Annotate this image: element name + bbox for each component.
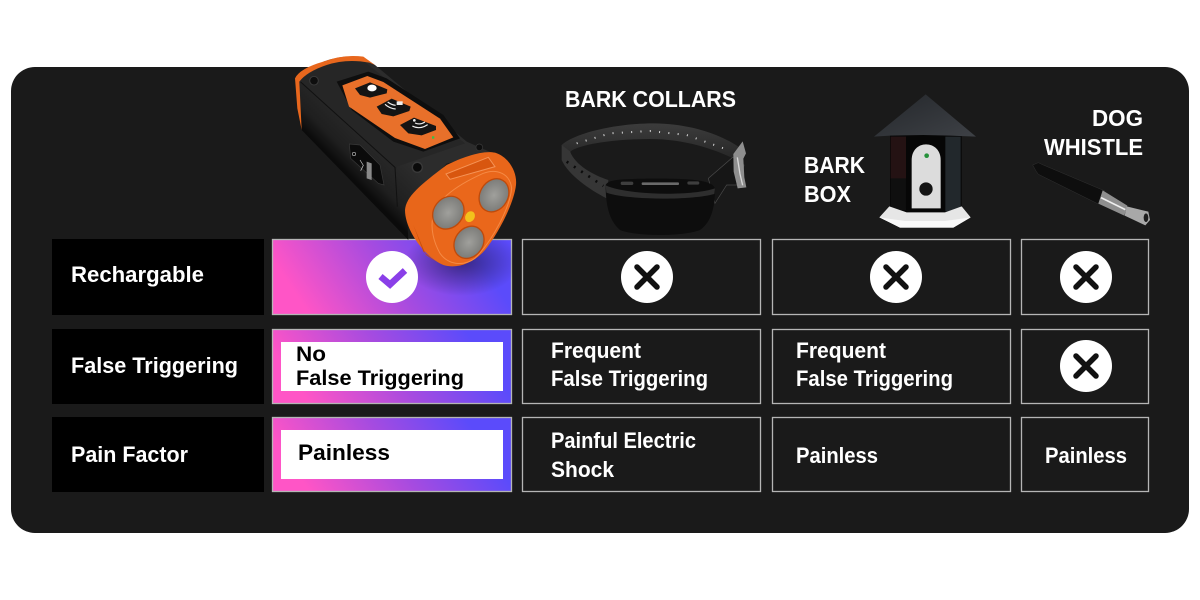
heading: Bark Box: BARK [804, 152, 865, 178]
icon: dog whistle [1033, 163, 1150, 225]
label: Rechargable: Rechargable [71, 262, 204, 287]
bark box white panel [912, 144, 941, 208]
row: False Triggering [52, 329, 1148, 404]
bark collars cell text: Shock [551, 457, 615, 482]
highlighted cell with check icon [272, 228, 520, 314]
bark box cell text: False Triggering [796, 366, 953, 391]
bark box cell text: Frequent [796, 338, 887, 363]
collar strap front [562, 145, 608, 198]
heading: Bark Box [804, 152, 865, 207]
label: False Triggering [52, 329, 264, 404]
collar buckle [733, 141, 746, 188]
dog whistle cell: X icon [1022, 240, 1148, 314]
label: Pain Factor: Pain Factor [71, 442, 188, 467]
icon: bark box [874, 94, 976, 228]
collar right strap [708, 157, 744, 203]
highlighted cell: No False Triggering: No [296, 343, 326, 366]
dog whistle cell text [1022, 418, 1148, 492]
bark box cell text [772, 330, 1010, 404]
heading: Bark Box: BOX [804, 181, 852, 207]
heading: Dog Whistle: WHISTLE [1044, 134, 1143, 160]
heading: Dog Whistle: DOG [1092, 105, 1143, 131]
collar strap back [562, 123, 743, 160]
heading: Bark Collars: BARK COLLARS [565, 86, 736, 112]
label: Pain Factor [52, 417, 264, 492]
device orange front face [405, 152, 516, 266]
device side switch [349, 144, 384, 185]
icon: ultrasonic device [295, 56, 516, 266]
device buttons [355, 82, 436, 139]
collar receiver [606, 179, 715, 235]
bark box roof [874, 94, 976, 137]
label: Rechargable [52, 239, 264, 315]
bark box cell text: Painless [796, 443, 878, 468]
row: Pain Factor [52, 417, 1148, 492]
bark collars cell text: Painful Electric [551, 428, 696, 453]
device speakers [426, 190, 471, 235]
bark collars cell text: False Triggering [551, 366, 708, 391]
background panel [11, 67, 1189, 533]
bark box base [879, 206, 971, 228]
bark collars cell: X icon [522, 240, 760, 314]
device body top face [300, 60, 465, 173]
bark box cell text [772, 418, 1010, 492]
icon: bark collar [562, 123, 746, 235]
bark box walls [890, 135, 962, 213]
highlighted cell: Painless: Painless [298, 440, 390, 465]
whistle metal tip [1125, 206, 1150, 225]
row: Rechargable [52, 228, 1148, 315]
bark collars cell text [522, 330, 760, 404]
highlighted cell: No False Triggering: False Triggering [296, 367, 464, 390]
highlighted cell: No False Triggering [272, 330, 512, 404]
label: False Triggering: False Triggering [71, 353, 238, 378]
device button plate [337, 72, 460, 152]
heading: Dog Whistle [1044, 105, 1143, 160]
whistle metal section [1098, 190, 1127, 216]
dog whistle cell: X icon [1022, 330, 1148, 404]
collar strap holes [577, 131, 730, 151]
device body side [295, 56, 493, 240]
bark box cell: X icon [772, 240, 1010, 314]
dog whistle cell text: Painless [1045, 443, 1127, 468]
bark collars cell text [522, 418, 760, 492]
highlighted cell: Painless [272, 418, 512, 492]
whistle black barrel [1033, 163, 1105, 204]
bark collars cell text: Frequent [551, 338, 642, 363]
device rear orange rim [295, 56, 375, 130]
